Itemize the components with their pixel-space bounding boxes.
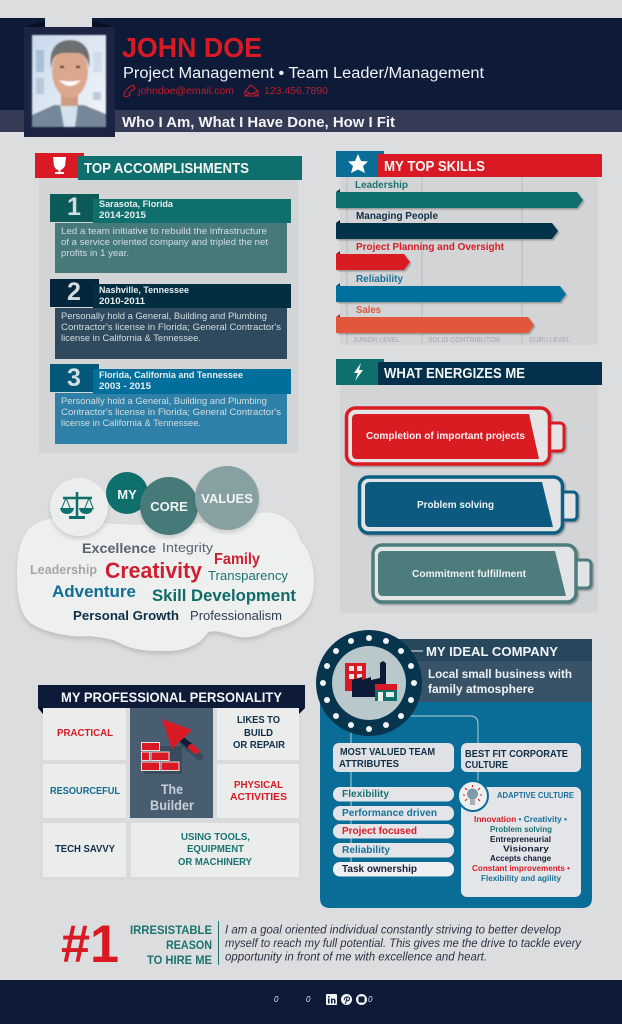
box: adaptive culture: Entrepreneurial xyxy=(490,834,551,844)
skill: sales xyxy=(336,304,534,333)
icon: envelope xyxy=(245,85,258,96)
photo frame with portrait xyxy=(24,27,115,137)
scale labels xyxy=(353,337,570,344)
scale labels: GURU LEVEL xyxy=(529,337,570,344)
heading bar xyxy=(375,639,592,661)
job title: Project Management • Team Leader/Management xyxy=(123,65,485,82)
footer: 0 xyxy=(274,995,279,1004)
heading banner xyxy=(38,685,305,714)
accomplishment 2: Contractor's license in Florida; General Contractor's xyxy=(61,322,281,333)
cell: the builder xyxy=(130,708,213,818)
icon: lightning tab xyxy=(336,359,384,385)
statement: opportunity in front of me with excellence and heart. xyxy=(225,952,487,964)
box: adaptive culture: Flexibility and agility xyxy=(481,873,561,883)
scale labels: JUNIOR LEVEL xyxy=(353,337,400,344)
bubble: my xyxy=(106,472,148,514)
attribute: task ownership: Task ownership xyxy=(342,863,417,875)
bubble: my: MY xyxy=(117,487,137,502)
heading bar: WHAT ENERGIZES ME xyxy=(384,365,525,382)
heading banner: MY PROFESSIONAL PERSONALITY xyxy=(61,689,283,705)
box: most valued team attributes: ATTRIBUTES xyxy=(339,759,399,770)
skill: managing people xyxy=(336,210,558,239)
reason label xyxy=(130,923,212,967)
word cloud: Excellence xyxy=(82,540,156,556)
battery: commitment xyxy=(373,545,591,602)
box: most valued team attributes: MOST VALUED TEAM xyxy=(340,747,435,758)
word cloud: Transparency xyxy=(208,569,289,583)
accomplishment 2: Nashville, Tennessee xyxy=(99,285,189,296)
box: adaptive culture: ADAPTIVE CULTURE xyxy=(497,790,574,800)
cell: likes to build or repair: BUILD xyxy=(244,728,273,739)
attribute: performance driven xyxy=(333,806,454,820)
accomplishment 3: 2003 - 2015 xyxy=(99,381,152,392)
box: adaptive culture: Problem solving xyxy=(490,824,552,834)
icon: factory medallion xyxy=(316,630,422,736)
attribute: project focused: Project focused xyxy=(342,825,417,837)
number one reason to hire me xyxy=(61,915,582,974)
panel: my ideal company xyxy=(316,630,592,908)
footer xyxy=(0,980,622,1024)
accomplishment 1: 1 xyxy=(67,193,81,221)
heading bar xyxy=(78,156,302,180)
icon: phone xyxy=(124,86,135,97)
subheading: company description: Local small business with xyxy=(428,667,572,681)
accomplishment 3: Personally hold a General, Building and Plumbing xyxy=(61,396,267,407)
skill: leadership xyxy=(336,179,583,208)
box: adaptive culture: Constant improvements • xyxy=(472,863,570,873)
my core values cloud xyxy=(17,466,314,651)
heading bar xyxy=(378,154,602,177)
cell: the builder: Builder xyxy=(150,798,195,813)
word cloud: Creativity xyxy=(105,558,203,583)
statement xyxy=(225,924,582,964)
panel: what energizes me xyxy=(336,359,602,613)
skill: managing people: Managing People xyxy=(356,210,438,222)
battery: completion xyxy=(346,408,564,464)
subheading: company description xyxy=(375,661,592,702)
bubble: values: VALUES xyxy=(201,491,253,506)
accomplishment 2: Personally hold a General, Building and Plumbing xyxy=(61,311,267,322)
accomplishment 3: license in California & Tennessee. xyxy=(61,418,201,429)
word cloud: Skill Development xyxy=(152,586,296,605)
icon: star tab xyxy=(336,151,384,177)
heading bar: MY IDEAL COMPANY xyxy=(426,644,558,659)
box: best fit corporate culture: CULTURE xyxy=(465,759,508,771)
cell: likes to build or repair xyxy=(217,708,299,760)
cell: physical activities xyxy=(217,764,299,818)
attribute: performance driven: Performance driven xyxy=(342,807,437,819)
accomplishment 1: of a service oriented company and tripled the net xyxy=(61,237,268,248)
box: adaptive culture: Accepts change xyxy=(490,853,551,863)
cell: using tools: USING TOOLS, xyxy=(181,832,250,843)
icon: trophy tab xyxy=(35,153,84,178)
cell: physical activities: ACTIVITIES xyxy=(230,792,287,803)
cell: using tools: OR MACHINERY xyxy=(178,857,252,868)
skill: reliability: Reliability xyxy=(356,273,403,285)
attribute: task ownership xyxy=(333,862,454,876)
accomplishment 3: 3 xyxy=(67,364,81,392)
skill: project planning xyxy=(336,241,504,270)
icon: bricks and trowel xyxy=(142,719,200,774)
battery: commitment: Commitment fulfillment xyxy=(412,568,526,580)
accomplishment 1: Led a team initiative to rebuild the infrastructure xyxy=(61,226,267,237)
statement: myself to reach my full potential. This gives me the drive to tackle every xyxy=(225,938,582,950)
panel: top skills xyxy=(336,151,602,345)
big number: #1 xyxy=(61,915,119,974)
accomplishment 2: 2010-2011 xyxy=(99,296,146,307)
bubble: core xyxy=(140,477,198,535)
icon: light bulb xyxy=(458,781,488,811)
reason label: REASON xyxy=(166,938,212,952)
word cloud: Family xyxy=(214,551,260,568)
scale labels: SOLID CONTRIBUTOR xyxy=(428,337,500,344)
tagline: Who I Am, What I Have Done, How I Fit xyxy=(122,114,395,131)
word cloud: Integrity xyxy=(162,541,214,555)
header banner xyxy=(0,18,622,137)
email: johndoe@email.com xyxy=(137,86,234,97)
accomplishment 1: profits in 1 year. xyxy=(61,248,129,259)
icon: linkedin xyxy=(326,994,337,1005)
word cloud xyxy=(30,540,296,623)
cell: resourceful: RESOURCEFUL xyxy=(50,786,120,797)
footer: 0 xyxy=(306,995,311,1004)
cell: physical activities: PHYSICAL xyxy=(234,780,283,791)
battery: problem solving xyxy=(360,477,577,533)
skill: project planning: Project Planning and Oversight xyxy=(356,241,504,253)
box: adaptive culture xyxy=(458,781,581,897)
cell: likes to build or repair: OR REPAIR xyxy=(233,740,286,751)
accomplishment 1: Sarasota, Florida xyxy=(99,199,174,210)
cloud shape xyxy=(17,513,314,651)
footer: 0 xyxy=(368,995,373,1004)
name: JOHN DOE xyxy=(122,32,262,63)
cell: practical xyxy=(43,708,126,760)
attribute: project focused xyxy=(333,824,454,838)
heading bar xyxy=(378,362,602,385)
heading bar: MY TOP SKILLS xyxy=(384,158,485,175)
cell: using tools: EQUIPMENT xyxy=(187,844,244,855)
icon: instagram xyxy=(356,994,367,1005)
cell: practical: PRACTICAL xyxy=(57,728,113,739)
attribute: reliability xyxy=(333,843,454,858)
cell: tech savvy: TECH SAVVY xyxy=(55,844,115,855)
accomplishment 2 xyxy=(50,278,291,359)
accomplishment 3 xyxy=(50,364,291,444)
bubble: core: CORE xyxy=(150,499,188,514)
battery: problem solving: Problem solving xyxy=(417,499,494,511)
skill: leadership: Leadership xyxy=(355,179,408,191)
reason label: IRRESISTABLE xyxy=(130,923,212,937)
skill: reliability xyxy=(336,273,566,302)
bubble: values xyxy=(195,466,259,530)
attribute: reliability: Reliability xyxy=(342,844,390,856)
panel: my professional personality xyxy=(38,685,305,880)
accomplishment 1: 2014-2015 xyxy=(99,210,147,221)
word cloud: Adventure xyxy=(52,582,136,601)
accomplishment 2: 2 xyxy=(67,278,81,306)
box: adaptive culture: Innovation • Creativity • xyxy=(474,814,567,824)
accomplishment 1 xyxy=(50,193,291,273)
box: most valued team attributes xyxy=(333,743,454,772)
cell: the builder: The xyxy=(161,782,183,797)
reason label: TO HIRE ME xyxy=(147,953,212,967)
attribute: flexibility: Flexibility xyxy=(342,788,389,800)
box: best fit corporate culture: BEST FIT CORPORATE xyxy=(465,748,568,760)
heading bar: TOP ACCOMPLISHMENTS xyxy=(84,160,249,177)
word cloud: Professionalism xyxy=(190,609,282,623)
skill: sales: Sales xyxy=(356,304,381,316)
icon: pinterest xyxy=(341,994,352,1005)
word cloud: Personal Growth xyxy=(73,608,179,623)
cell: tech savvy xyxy=(43,823,126,877)
phone number: 123.456.7890 xyxy=(264,86,328,97)
cell: likes to build or repair: LIKES TO xyxy=(237,715,280,726)
cell: using tools xyxy=(131,823,299,877)
battery: completion: Completion of important projects xyxy=(366,430,525,442)
attribute: flexibility xyxy=(333,787,454,802)
accomplishment 3: Contractor's license in Florida; General Contractor's xyxy=(61,407,281,418)
subheading: company description: family atmosphere xyxy=(428,682,534,696)
statement: I am a goal oriented individual constantly striving to better develop xyxy=(225,924,562,936)
word cloud: Leadership xyxy=(30,563,97,577)
box: adaptive culture: Visionary xyxy=(503,844,549,854)
cell: resourceful xyxy=(43,764,126,818)
box: best fit corporate culture xyxy=(461,743,581,772)
icon: scales of justice xyxy=(50,478,108,536)
accomplishment 2: license in California & Tennessee. xyxy=(61,333,201,344)
panel: top accomplishments xyxy=(35,153,302,453)
accomplishment 3: Florida, California and Tennessee xyxy=(99,370,243,381)
